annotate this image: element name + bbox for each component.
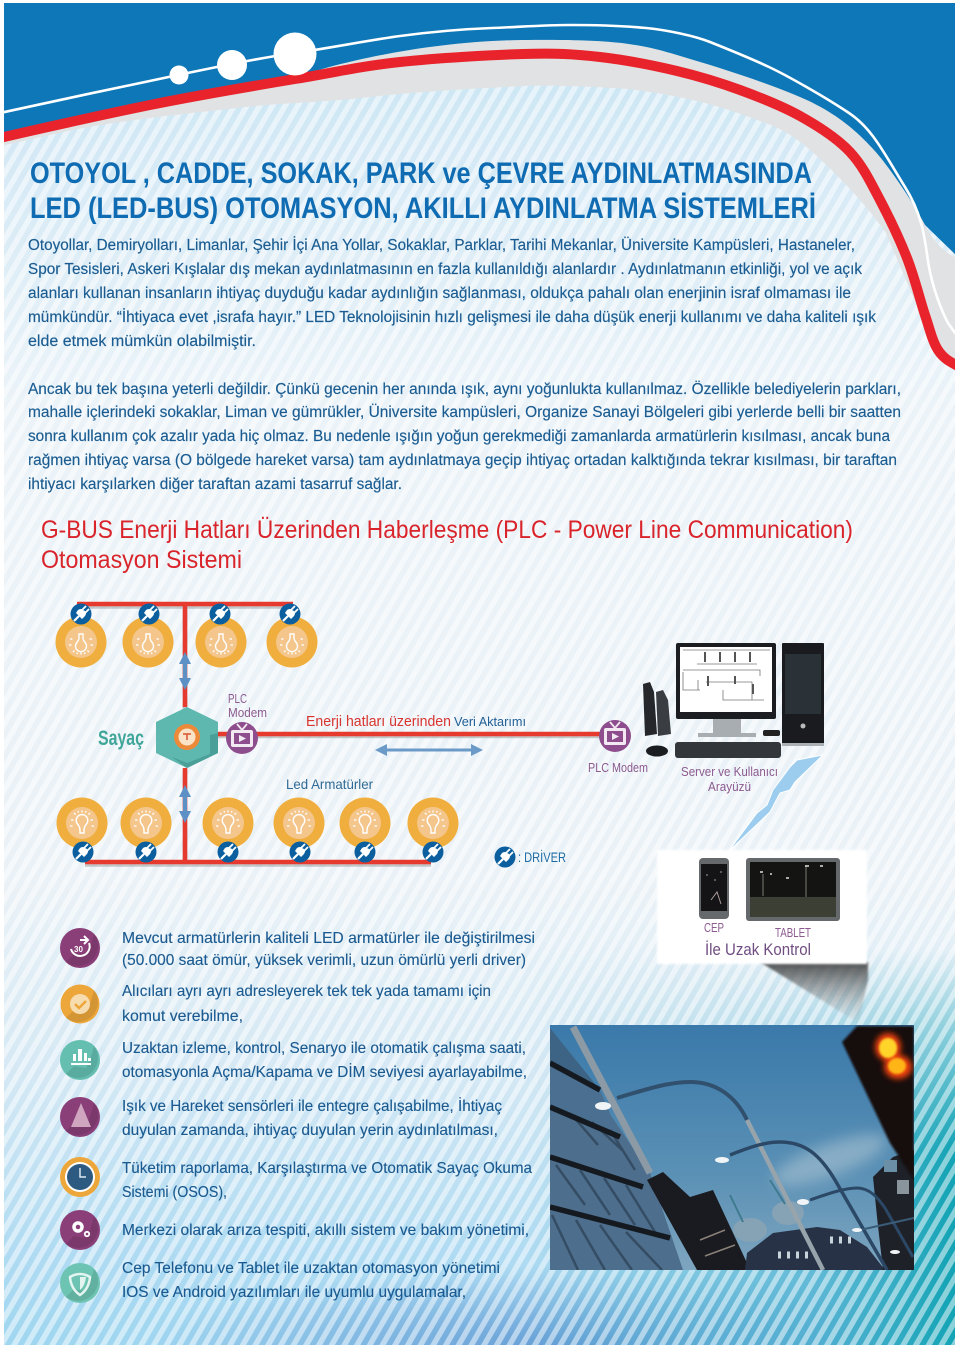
power lines — [77, 604, 600, 864]
section heading: Otomasyon Sistemi — [41, 546, 242, 574]
street photo — [550, 1025, 914, 1270]
computer workstation — [643, 643, 824, 758]
dark block — [647, 1172, 747, 1270]
data transfer label: Enerji hatları üzerinden — [306, 713, 451, 730]
led fixtures label: Led Armatürler — [286, 776, 373, 792]
second paragraph: mahalle içlerindeki sokaklar, Liman ve gümrükler, Üniversite kampüsleri, Organize Sanayi Bölgeleri gibi yerlerde belli bir saatten — [28, 403, 901, 421]
intro paragraph: mümkündür. “İhtiyaca evet ,israfa hayır.” LED Teknolojisinin hızlı gelişmesi ile daha düşük enerji kullanımı ve daha kaliteli ışık — [28, 308, 876, 326]
left modem icon — [226, 722, 258, 754]
clouds — [770, 1128, 890, 1191]
top drivers — [70, 604, 300, 624]
intro paragraph — [28, 236, 876, 350]
section heading: G-BUS Enerji Hatları Üzerinden Haberleşme (PLC - Power Line Communication) — [41, 516, 853, 544]
traffic light — [842, 1026, 914, 1180]
feature 5 — [60, 1157, 532, 1201]
feature list — [60, 928, 535, 1303]
feature 7: IOS ve Android yazılımları ile uyumlu uygulamalar, — [122, 1284, 466, 1301]
bottom drivers — [72, 842, 444, 862]
right modem label: PLC Modem — [588, 761, 648, 775]
mouse — [646, 746, 668, 756]
data transfer label: Veri Aktarımı — [454, 714, 526, 729]
intro paragraph: Otoyollar, Demiryolları, Limanlar, Şehir İçi Ana Yollar, Sokaklar, Parklar, Tarihi Mekanlar, Üniversite Kampüsleri, Hastaneler, — [28, 236, 855, 254]
keyboard — [675, 742, 781, 758]
driver legend — [494, 846, 566, 868]
feature 3: otomasyonla Açma/Kapama ve DİM seviyesi ayarlayabilme, — [122, 1062, 527, 1081]
feature 5: Sistemi (OSOS), — [122, 1184, 227, 1201]
second paragraph — [28, 380, 901, 493]
street lamps — [595, 1082, 914, 1270]
feature 6: Merkezi olarak arıza tespiti, akıllı sistem ve bakım yönetimi, — [122, 1222, 529, 1239]
phone label: CEP — [704, 921, 724, 935]
feature 4: Işık ve Hareket sensörleri ile entegre çalışabilme, İhtiyaç — [122, 1096, 502, 1115]
feature 3 — [60, 1040, 527, 1081]
server label: Arayüzü — [708, 780, 751, 794]
top lamps — [56, 616, 318, 668]
header swoosh — [0, 0, 960, 372]
network diagram — [56, 604, 778, 868]
title — [30, 157, 816, 225]
remote control shadow — [760, 962, 868, 1023]
intro paragraph: alanları kullanan insanların ihtiyaç duyduğu kadar aydınlığın sağlanması, oldukça pahalı olan enerjinin israf olmaması ile — [28, 285, 851, 302]
small device — [763, 730, 780, 736]
feature 3: Uzaktan izleme, kontrol, Senaryo ile otomatik çalışma saati, — [122, 1040, 526, 1057]
feature 5: Tüketim raporlama, Karşılaştırma ve Otomatik Sayaç Okuma — [122, 1160, 532, 1177]
right building — [873, 1150, 914, 1270]
feature 6 — [60, 1210, 529, 1250]
meter label: Sayaç — [98, 727, 144, 750]
driver legend: : DRİVER — [518, 850, 566, 865]
feature 1 — [60, 928, 535, 969]
far buildings — [745, 1227, 885, 1270]
second paragraph: rağmen ihtiyaç varsa (O bölgede hareket varsa) tam aydınlatmaya geçip ihtiyaç ortadan kalktığında tekrar kısılması, bir taraftan — [28, 452, 897, 469]
bottom lamps — [56, 798, 458, 848]
server label: Server ve Kullanıcı — [681, 765, 778, 779]
left glass building — [550, 1027, 683, 1270]
title: LED (LED-BUS) OTOMASYON, AKILLI AYDINLATMA SİSTEMLERİ — [30, 192, 816, 225]
tablet — [746, 858, 840, 921]
feature 1: Mevcut armatürlerin kaliteli LED armatürler ile değiştirilmesi — [122, 930, 535, 947]
feature 2: Alıcıları ayrı ayrı adresleyerek tek tek yada tamamı için — [122, 983, 491, 1000]
intro paragraph: elde etmek mümkün olabilmiştir. — [28, 333, 256, 350]
tablet label: TABLET — [775, 926, 811, 940]
arrow: vertical top — [179, 652, 191, 690]
section heading — [41, 516, 853, 574]
left modem label — [228, 692, 267, 720]
intro paragraph: Spor Tesisleri, Askeri Kışlalar dış mekan aydınlatmasının en fazla kullanıldığı alanlardır . Aydınlatmanın etkinliği, yol ve açık — [28, 261, 862, 278]
left modem label: PLC — [228, 692, 247, 706]
wireless bolt — [728, 755, 823, 852]
feature 1: (50.000 saat ömür, yüksek verimli, uzun ömürlü yerli driver) — [122, 952, 526, 969]
feature 4: duyulan zamanda, ihtiyaç duyulan yerin aydınlatılması, — [122, 1122, 498, 1139]
phone — [699, 858, 729, 919]
meter hexagon — [156, 707, 218, 768]
tower — [782, 643, 824, 746]
right modem icon — [599, 720, 631, 752]
remote control label: İle Uzak Kontrol — [705, 940, 811, 959]
server label — [681, 765, 778, 794]
feature 7 — [60, 1260, 500, 1303]
second paragraph: Ancak bu tek başına yeterli değildir. Çünkü gecenin her anında ışık, aynı yoğunlukta kullanılmaz. Özellikle belediyelerin parkları, — [28, 380, 901, 398]
feature 4 — [60, 1096, 502, 1139]
monitor — [676, 643, 776, 737]
feature 2 — [60, 983, 491, 1025]
title: OTOYOL , CADDE, SOKAK, PARK ve ÇEVRE AYDINLATMASINDA — [30, 157, 812, 190]
feature 1: 30 — [74, 945, 83, 954]
second paragraph: ihtiyacı karşılarken diğer taraftan azami tasarruf sağlar. — [28, 476, 402, 493]
remote control panel — [657, 850, 867, 964]
feature 7: Cep Telefonu ve Tablet ile uzaktan otomasyon yönetimi — [122, 1260, 500, 1277]
arrow: vertical bottom — [179, 785, 191, 823]
speakers — [643, 682, 671, 736]
feature 2: komut verebilme, — [122, 1008, 243, 1025]
left modem label: Modem — [228, 706, 267, 720]
arrow: horizontal data — [375, 744, 483, 756]
domes — [730, 1180, 804, 1242]
second paragraph: sonra kullanım çok azalır yada hiç olmaz. Bu nedenle ışığın yoğun gerekmediği zamanlarda armatürlerin kısılması, ancak buna — [28, 428, 890, 445]
